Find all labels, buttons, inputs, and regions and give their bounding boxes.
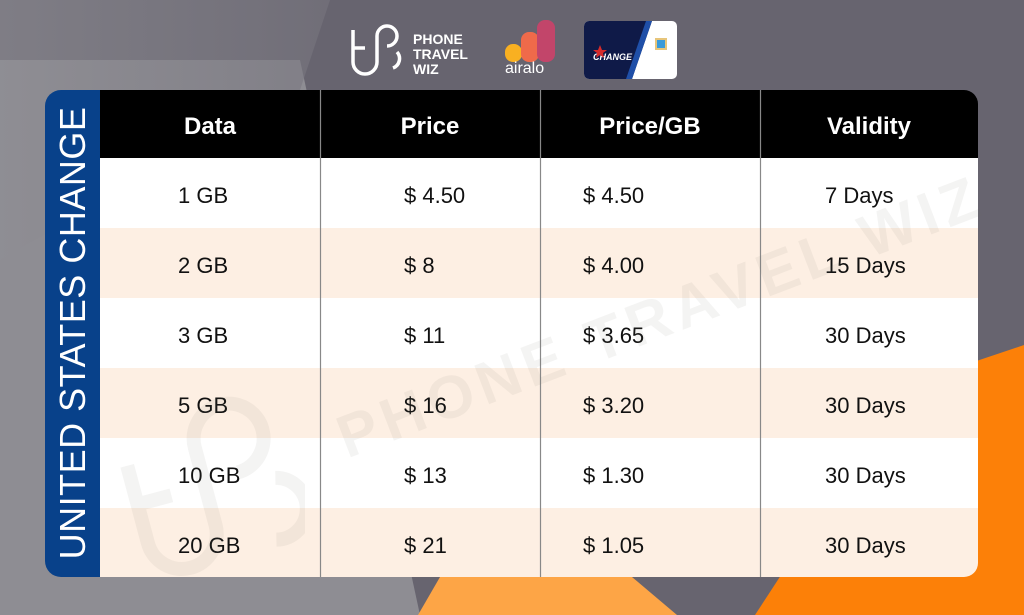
row 2: 2 GB bbox=[178, 253, 228, 278]
row 3: 30 Days bbox=[825, 323, 906, 348]
row 1 bbox=[100, 158, 978, 228]
row 3: $ 11 bbox=[404, 323, 445, 348]
row 6: 20 GB bbox=[178, 533, 240, 558]
row 2: $ 8 bbox=[404, 253, 435, 278]
logo: phone travel wiz: WIZ bbox=[413, 61, 439, 77]
watermark: PHONE TRAVEL WIZ bbox=[328, 162, 993, 471]
row 4: $ 16 bbox=[404, 393, 447, 418]
logo: phone travel wiz bbox=[351, 24, 468, 77]
logo: phone travel wiz: TRAVEL bbox=[413, 46, 468, 62]
row 5: 30 Days bbox=[825, 463, 906, 488]
row 1: $ 4.50 bbox=[404, 183, 465, 208]
table header: Data bbox=[184, 113, 236, 140]
row 6: 30 Days bbox=[825, 533, 906, 558]
row 3 bbox=[100, 298, 978, 368]
logo: phone travel wiz: PHONE bbox=[413, 31, 463, 47]
row 2 bbox=[100, 228, 978, 298]
logo: airalo bbox=[505, 20, 555, 77]
row 3: $ 3.65 bbox=[583, 323, 644, 348]
row 6: $ 1.05 bbox=[583, 533, 644, 558]
row 5: $ 1.30 bbox=[583, 463, 644, 488]
logo: airalo: airalo bbox=[505, 60, 544, 77]
row 4 bbox=[100, 368, 978, 438]
row 1: 1 GB bbox=[178, 183, 228, 208]
row 1: 7 Days bbox=[825, 183, 893, 208]
row 5: 10 GB bbox=[178, 463, 240, 488]
row 5: $ 13 bbox=[404, 463, 447, 488]
logo: change card bbox=[584, 21, 677, 79]
table header: Validity bbox=[827, 113, 911, 140]
logo: change card: CHANGE bbox=[593, 52, 633, 62]
row 4: 30 Days bbox=[825, 393, 906, 418]
row 2: 15 Days bbox=[825, 253, 906, 278]
table header: Price/GB bbox=[599, 113, 701, 140]
sidebar: United States Change: UNITED STATES CHANGE bbox=[52, 107, 93, 559]
watermark logo bbox=[120, 397, 305, 576]
row 4: 5 GB bbox=[178, 393, 228, 418]
logos header bbox=[351, 20, 677, 79]
row 3: 3 GB bbox=[178, 323, 228, 348]
row 6 bbox=[100, 508, 978, 577]
row 6: $ 21 bbox=[404, 533, 447, 558]
table header: Price bbox=[401, 113, 459, 140]
sidebar: United States Change bbox=[45, 90, 101, 577]
row 5 bbox=[100, 438, 978, 508]
table header bbox=[100, 90, 978, 158]
row 1: $ 4.50 bbox=[583, 183, 644, 208]
row 4: $ 3.20 bbox=[583, 393, 644, 418]
row 2: $ 4.00 bbox=[583, 253, 644, 278]
